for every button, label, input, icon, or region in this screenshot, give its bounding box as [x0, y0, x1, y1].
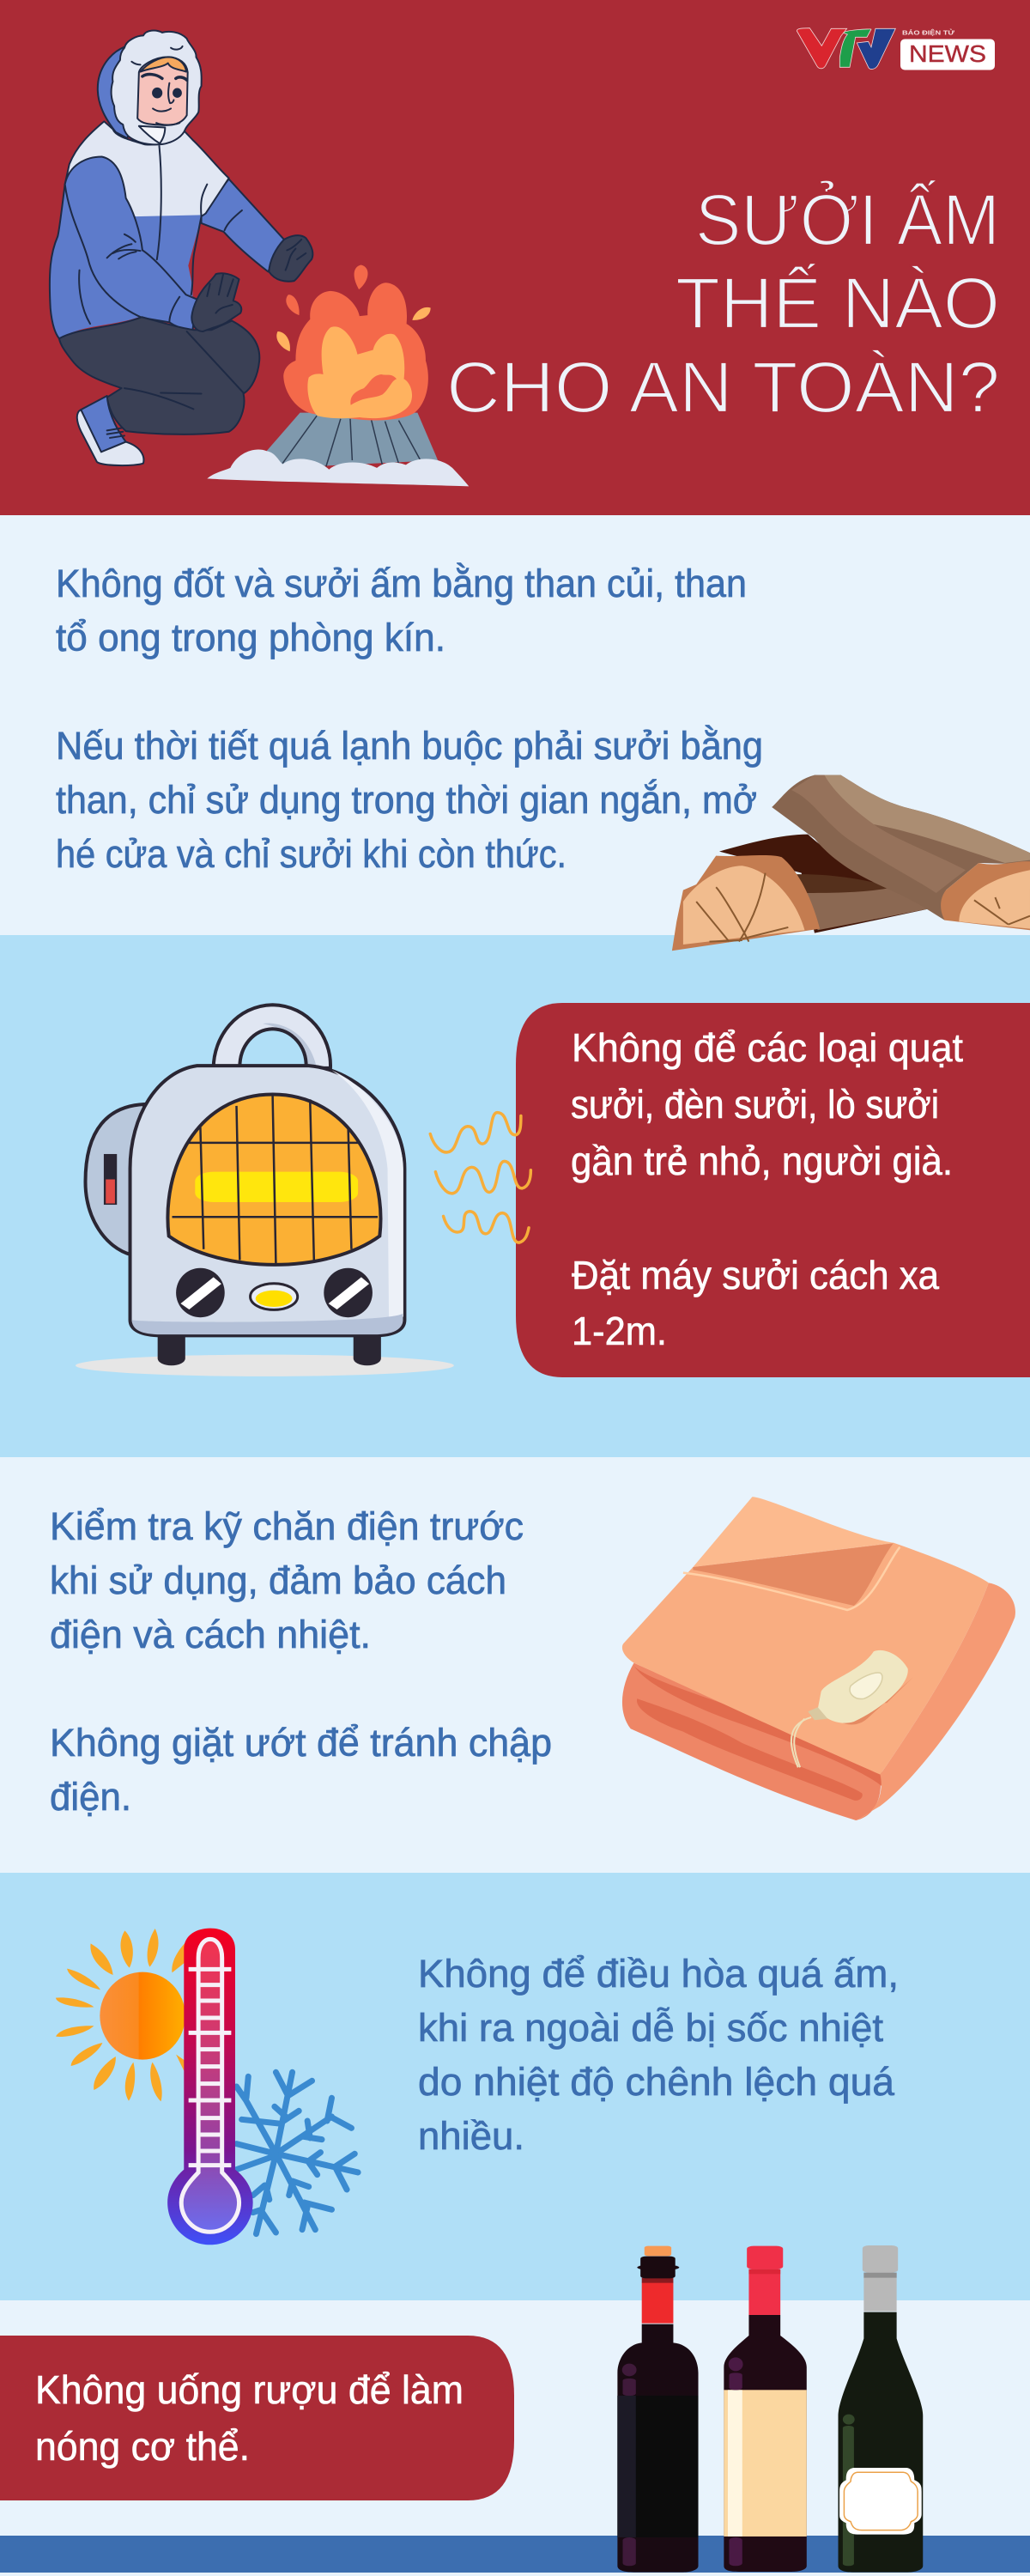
remote control — [824, 1677, 913, 1725]
text: electric blanket: Kiểm tra kỹ chăn điện trước — [50, 1504, 524, 1548]
sparks — [354, 265, 368, 289]
illustration: campfire — [207, 265, 469, 486]
panel: heater distance callout: Không để các loại quạt — [572, 1025, 963, 1070]
knobs — [176, 1268, 225, 1317]
text: charcoal warning: hé cửa và chỉ sưởi khi còn thức. — [56, 832, 566, 876]
illustration: firewood logs — [672, 775, 1030, 951]
panel: alcohol callout: nóng cơ thể. — [35, 2424, 250, 2469]
bottle 3 — [839, 2245, 923, 2573]
text: electric blanket — [50, 1504, 552, 1819]
text: air conditioner: do nhiệt độ chênh lệch quá — [418, 2060, 895, 2104]
pants — [59, 317, 259, 434]
illustration: sun, snowflake and thermometer — [56, 1929, 358, 2245]
text: electric blanket: Không giặt ướt để tránh chập — [50, 1721, 552, 1765]
collar — [139, 126, 165, 143]
grill — [167, 1095, 380, 1265]
text: charcoal warning: Nếu thời tiết quá lạnh buộc phải sưởi bằng — [56, 724, 763, 768]
panel: heater distance callout: sưởi, đèn sưởi, lò sưởi — [571, 1082, 939, 1127]
text: air conditioner — [418, 1952, 899, 2158]
logo: VTV News: BÁO ĐIỆN TỬ — [902, 29, 955, 36]
text: air conditioner: khi ra ngoài dễ bị sốc nhiệt — [418, 2006, 884, 2050]
title: THẾ NÀO — [676, 263, 1000, 343]
floor shadow — [76, 1355, 454, 1376]
text: charcoal warning — [56, 562, 763, 876]
logo: VTV News: NEWS — [909, 40, 986, 67]
title: CHO AN TOÀN? — [446, 347, 1000, 428]
snow — [207, 450, 469, 486]
text: charcoal warning: than, chỉ sử dụng trong thời gian ngắn, mở — [56, 778, 757, 822]
text: air conditioner: Không để điều hòa quá ấm, — [418, 1952, 899, 1996]
panel: alcohol callout — [0, 2336, 514, 2500]
thermometer tube — [167, 1929, 253, 2245]
sun — [100, 1972, 185, 2060]
panel: heater distance callout — [516, 1003, 1030, 1377]
snowflake — [237, 2072, 358, 2234]
jacket upper — [65, 121, 229, 220]
logo: VTV News — [797, 28, 995, 70]
fur hood — [112, 31, 202, 144]
bottle 1 — [617, 2246, 699, 2573]
feet — [158, 1330, 185, 1365]
panel: heater distance callout: Đặt máy sưởi cách xa — [572, 1253, 939, 1297]
back housing — [85, 1104, 144, 1255]
illustration: electric blanket — [622, 1497, 1015, 1820]
text: air conditioner: nhiều. — [418, 2114, 524, 2158]
wood pile — [267, 413, 438, 468]
text: electric blanket: điện. — [50, 1775, 131, 1819]
panel: heater distance callout: gần trẻ nhỏ, người già. — [571, 1139, 953, 1183]
icon: heat waves — [430, 1113, 530, 1242]
illustration: wine bottles — [617, 2245, 923, 2573]
text: charcoal warning: Không đốt và sưởi ấm bằng than củi, than — [56, 562, 747, 605]
sun rays — [56, 1929, 187, 2101]
shoe — [81, 396, 126, 453]
panel: alcohol callout: Không uống rượu để làm — [35, 2367, 464, 2412]
face — [137, 57, 188, 125]
illustration: person warming hands — [50, 31, 312, 465]
text: electric blanket: điện và cách nhiệt. — [50, 1613, 371, 1656]
handle — [214, 1005, 330, 1068]
body — [130, 1066, 404, 1335]
title: SƯỞI ẤM — [695, 179, 1000, 260]
jacket lower — [50, 185, 202, 338]
illustration: electric heater — [76, 1005, 454, 1376]
title — [446, 179, 1000, 428]
panel: heater distance callout: 1-2m. — [572, 1309, 667, 1353]
bottle 2 — [724, 2246, 807, 2572]
hood back — [98, 46, 136, 138]
flames — [283, 283, 428, 421]
left arm — [65, 156, 197, 330]
gloves — [191, 273, 241, 331]
hair — [141, 57, 186, 72]
right arm — [202, 179, 284, 271]
text: electric blanket: khi sử dụng, đảm bảo cách — [50, 1558, 506, 1602]
text: charcoal warning: tổ ong trong phòng kín. — [56, 616, 445, 659]
